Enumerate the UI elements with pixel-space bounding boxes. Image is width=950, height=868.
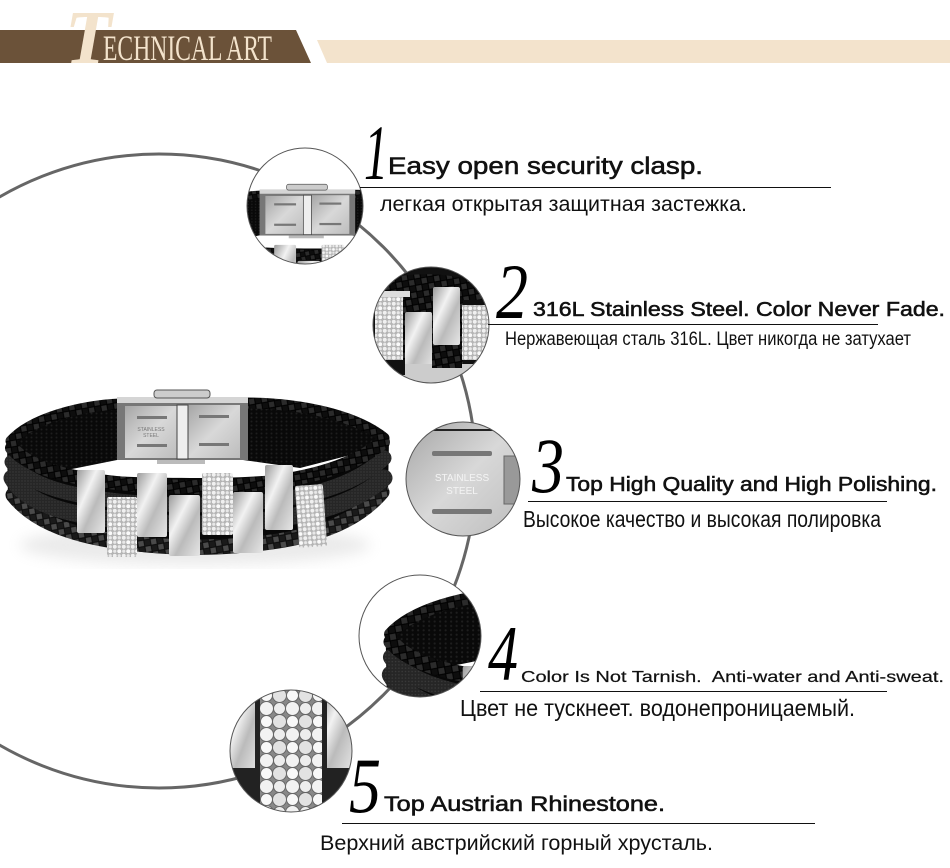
heading 5: Top Austrian Rhinestone. — [384, 793, 665, 816]
russian text 3: Высокое качество и высокая полировка — [523, 506, 881, 532]
russian text 4: Цвет не тускнеет. водонепроницаемый. — [460, 695, 855, 721]
russian text 1: легкая открытая защитная застежка. — [380, 193, 747, 216]
clasp engraving text: STAINLESS — [137, 427, 165, 433]
detail circle 5: rhinestone bar — [229, 690, 354, 815]
heading: technical art — [65, 0, 272, 80]
numeral 4: 4 — [488, 610, 518, 697]
detail circle 2: steel bars and rhinestones — [370, 267, 495, 384]
heading 4: Color Is Not Tarnish. Anti-water and Anti-sweat. — [521, 669, 944, 686]
rule 4 — [480, 691, 887, 692]
heading 2: 316L Stainless Steel. Color Never Fade. — [533, 299, 945, 321]
detail circle 3: engraved steel plate: STAINLESS — [435, 473, 489, 484]
detail circle 3: engraved steel plate — [406, 422, 520, 536]
rule 2 — [488, 324, 878, 325]
header banner: technical art — [0, 0, 950, 80]
numeral 5: 5 — [349, 742, 381, 829]
numeral 3: 3 — [531, 422, 564, 509]
bracelet shadow — [20, 525, 370, 565]
russian text 5: Верхний австрийский горный хрусталь. — [320, 832, 713, 855]
rule 5 — [342, 823, 815, 824]
large grey connecting circle — [0, 154, 476, 788]
detail circle 3: engraved steel plate: STEEL — [446, 486, 478, 497]
detail circle 1: clasp — [246, 148, 364, 264]
heading 1: Easy open security clasp. — [388, 153, 703, 180]
rule 1 — [360, 187, 831, 188]
detail circle 4: braided leather end — [358, 574, 482, 698]
main bracelet photo — [7, 390, 389, 557]
clasp engraving text: STEEL — [143, 433, 159, 439]
heading: technical art: ECHNICAL ART — [103, 28, 272, 68]
numeral 2: 2 — [496, 248, 528, 335]
heading 3: Top High Quality and High Polishing. — [566, 474, 937, 496]
rule 3 — [528, 501, 887, 502]
numeral 1: 1 — [364, 109, 388, 196]
